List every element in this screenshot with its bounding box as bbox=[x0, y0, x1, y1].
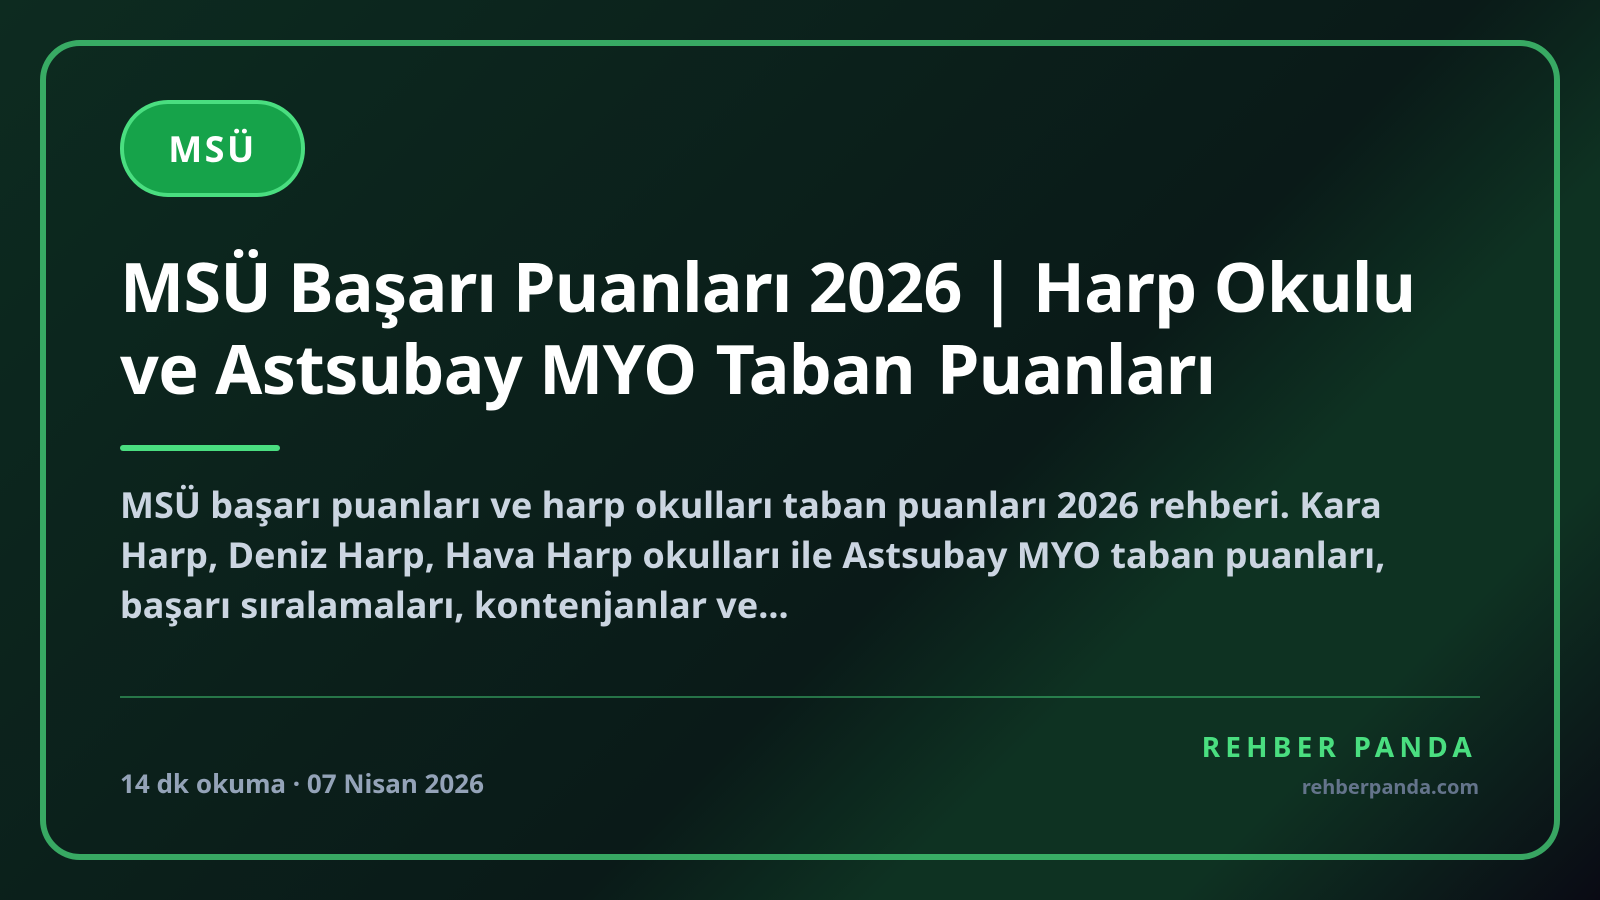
category badge bbox=[120, 100, 305, 197]
description: Harp, Deniz Harp, Hava Harp okulları ile Astsubay MYO taban puanları, bbox=[120, 530, 1385, 579]
title: ve Astsubay MYO Taban Puanları bbox=[120, 321, 1215, 414]
title bbox=[120, 239, 1415, 414]
accent bar bbox=[120, 445, 280, 451]
brand name: REHBER PANDA bbox=[1202, 728, 1477, 766]
description bbox=[120, 480, 1385, 629]
footer divider bbox=[120, 696, 1480, 698]
category badge: MSÜ bbox=[168, 124, 257, 173]
description: MSÜ başarı puanları ve harp okulları taban puanları 2026 rehberi. Kara bbox=[120, 480, 1382, 529]
title: MSÜ Başarı Puanları 2026 | Harp Okulu bbox=[120, 239, 1415, 332]
reading time and date: 14 dk okuma · 07 Nisan 2026 bbox=[120, 765, 484, 801]
description: başarı sıralamaları, kontenjanlar ve... bbox=[120, 580, 789, 629]
site url: rehberpanda.com bbox=[1302, 773, 1479, 800]
